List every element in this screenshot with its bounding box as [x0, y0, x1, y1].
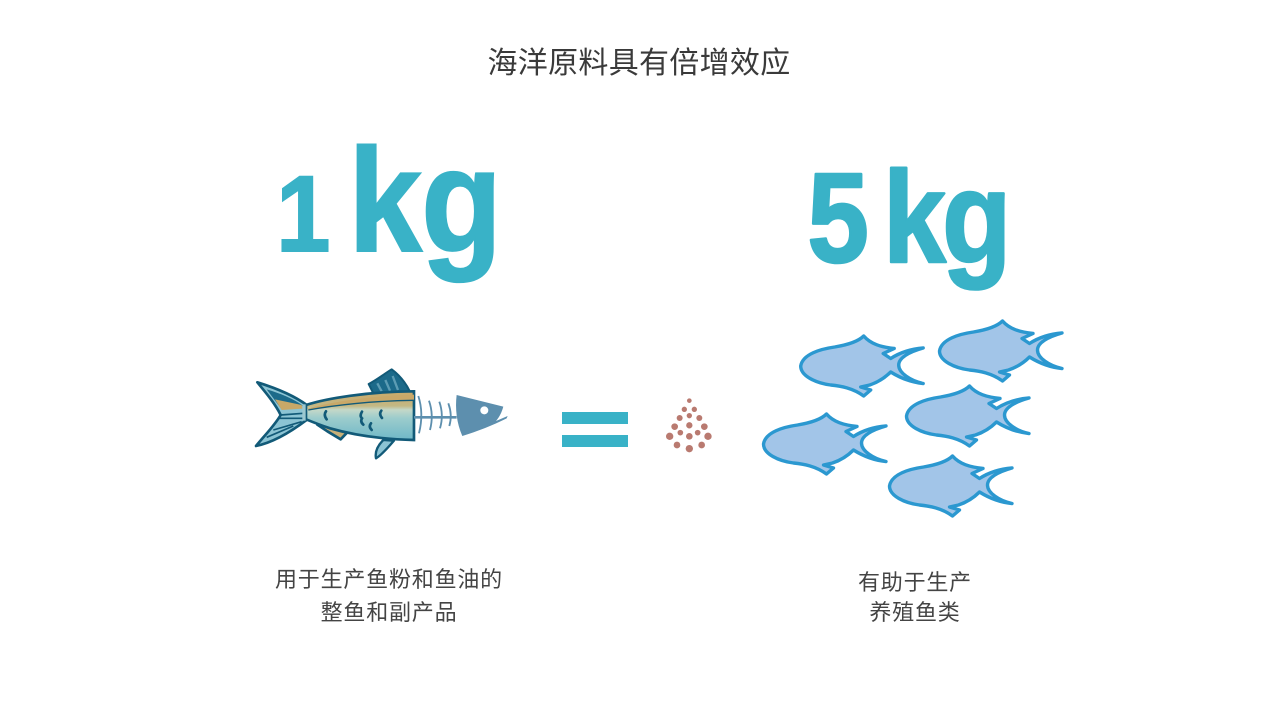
body spots [325, 411, 382, 430]
dorsal fin [369, 369, 410, 393]
title: 海洋原料具有倍增效应 [488, 47, 790, 80]
icon: school of five fish [764, 321, 1062, 516]
caption: right: 养殖鱼类 [869, 600, 961, 625]
tail [256, 382, 307, 446]
lower fins [317, 425, 348, 439]
number: 5kg: g [942, 145, 1011, 290]
number: 1kg: 1 [276, 153, 330, 274]
caption: left [275, 567, 503, 625]
icon: feed pellets [666, 398, 712, 452]
skeleton [414, 413, 457, 421]
icon: fish half skeleton [256, 369, 508, 458]
number: 1kg: g [421, 118, 502, 283]
number: 1kg: k [348, 118, 422, 283]
caption: right [858, 570, 972, 625]
number: 5kg: 5 [807, 148, 869, 290]
caption: left: 用于生产鱼粉和鱼油的 [275, 567, 503, 592]
equals sign [562, 412, 628, 447]
fish head [456, 395, 508, 436]
number: 5kg: k [883, 145, 946, 290]
body [306, 391, 414, 440]
caption: left: 整鱼和副产品 [321, 600, 457, 625]
caption: right: 有助于生产 [858, 570, 972, 595]
